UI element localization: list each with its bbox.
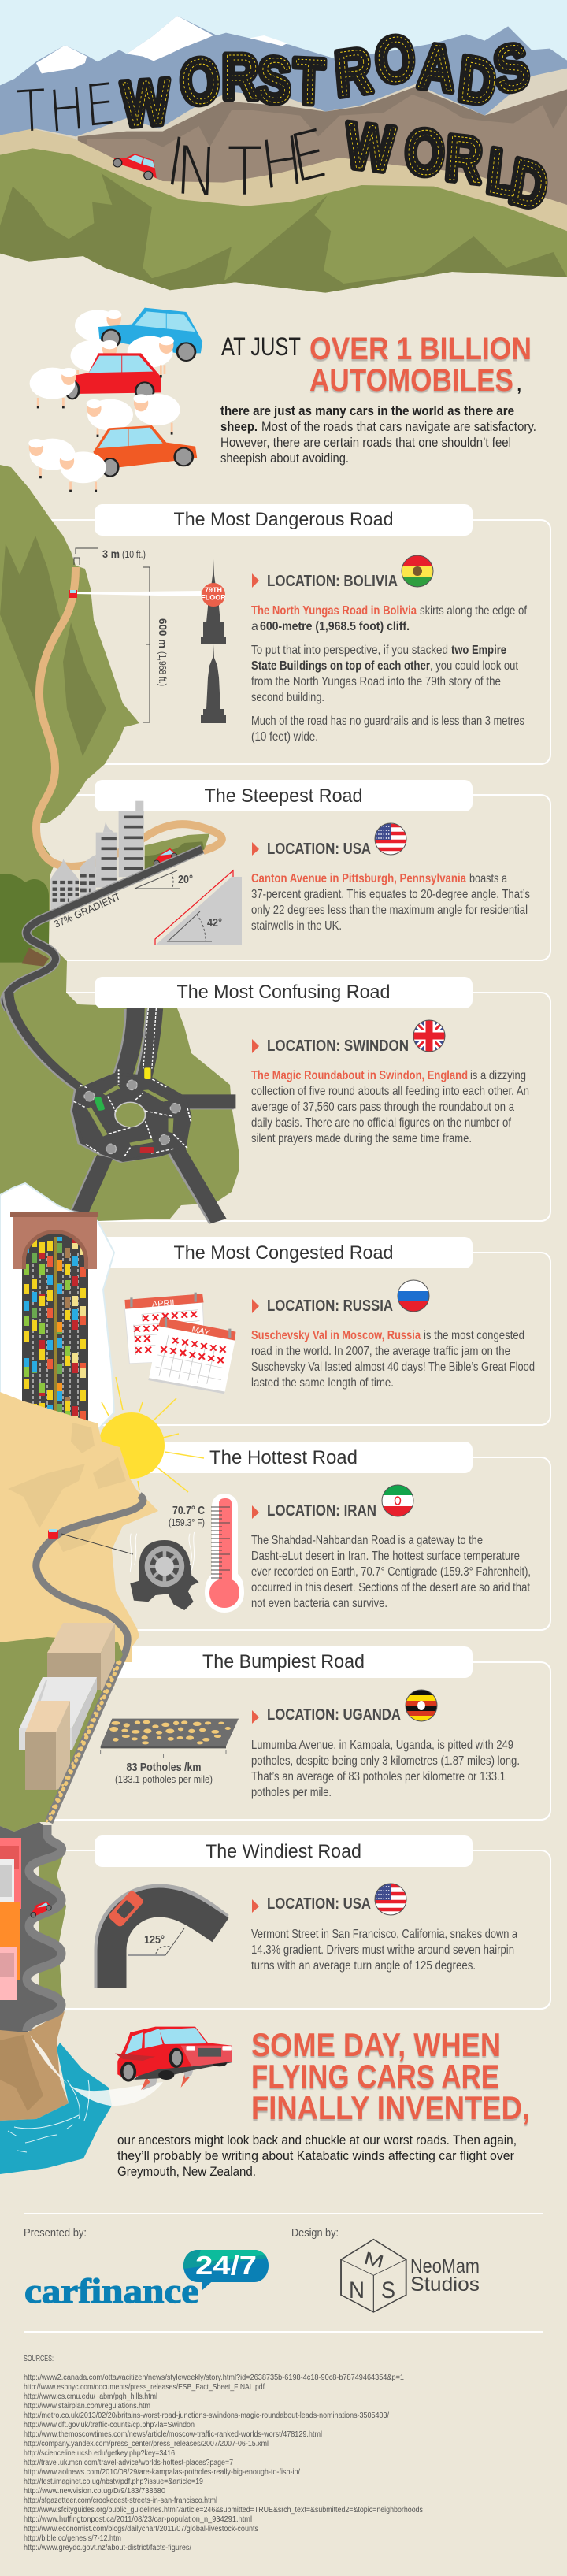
- flag: bolivia: [402, 555, 433, 587]
- icon: tiny red car on desert road: [48, 1529, 58, 1539]
- closing paragraph: our ancestors might look back and chuckle at our worst roads. Then again,: [117, 2132, 517, 2147]
- angle lines: [128, 1928, 184, 1955]
- location: usa (steepest): LOCATION: USA: [267, 841, 371, 858]
- heading: bumpiest: The Bumpiest Road: [202, 1651, 365, 1672]
- lane markings: [74, 1069, 191, 1157]
- location: russia: LOCATION: RUSSIA: [267, 1297, 393, 1315]
- title: road words: WORSTROADS: [122, 21, 534, 140]
- heading: most confusing: The Most Confusing Road: [176, 982, 391, 1003]
- label: design by: Design by:: [291, 2226, 339, 2240]
- diagram: 42 degree stairs: 42°: [207, 916, 222, 930]
- text: steepest road: boasts a: [469, 872, 507, 885]
- sources: http://www.dft.gov.uk/traffic-counts/cp.php?la=Swindon: [24, 2421, 195, 2429]
- sources: http://sfgazetteer.com/crookedest-streets-in-san-francisco.html: [24, 2496, 217, 2505]
- title: road words: WORLD: [345, 109, 554, 224]
- location: swindon: LOCATION: SWINDON: [267, 1037, 409, 1055]
- terrain: cliff: [0, 2011, 69, 2121]
- label: potholes per km: [115, 1761, 213, 1785]
- trees and soil: [0, 874, 49, 967]
- text: confusing road: average of 37,560 cars pass through the roundabout on a: [251, 1101, 514, 1114]
- sources: http://www.newvision.co.ug/D/9/183/738680: [24, 2487, 165, 2496]
- text: dangerous road: , you could look out: [430, 659, 518, 673]
- text: dangerous road: To put that into perspective, if you stacked: [251, 644, 448, 657]
- text: dangerous road: (10 feet) wide.: [251, 730, 318, 744]
- road: pothole road: [46, 1662, 120, 1822]
- flag: iran: [382, 1485, 413, 1516]
- illustration: sheep and cars: [28, 308, 202, 492]
- heading: steepest: [94, 780, 472, 811]
- intro paragraph: sheep.: [220, 419, 258, 434]
- small red car: [153, 848, 177, 866]
- diagram: 20 degree angle: [135, 870, 193, 889]
- wordmark: Studios: [410, 2273, 480, 2296]
- label: 37% gradient: 37% GRADIENT: [52, 890, 122, 930]
- closing paragraph: they’ll probably be writing about Katabatic winds affecting car flight over: [117, 2148, 514, 2163]
- mini roundabouts: [84, 1080, 180, 1154]
- traffic: [27, 1237, 83, 1430]
- illustration: melted tyre: [130, 1532, 199, 1610]
- sources: http://www.sfcityguides.org/public_guidelines.html?article=246&submitted=TRUE&srch_text=&submitted2=&topic=neighborhoods: [24, 2506, 423, 2515]
- divider: [24, 2213, 543, 2214]
- label: temperature: [169, 1504, 205, 1528]
- heading: most congested: The Most Congested Road: [173, 1242, 394, 1264]
- hero landscape: [0, 0, 567, 293]
- heading: windiest: [94, 1835, 472, 1867]
- text: dangerous road: [251, 604, 527, 744]
- location: bolivia: LOCATION: BOLIVIA: [267, 573, 398, 590]
- text: dangerous road: The North Yungas Road in Bolivia: [251, 604, 417, 618]
- illustration: pothole slab: [101, 1719, 239, 1758]
- sources: http://test.imaginet.co.ug/nbstv/pdf.php?issue=&article=19: [24, 2478, 203, 2486]
- sources: http://www.aolnews.com/2010/08/29/are-kampalas-potholes-really-big-enough-to-fish-in/: [24, 2468, 300, 2477]
- sources: http://www.stairplan.com/regulations.htm: [24, 2402, 150, 2411]
- terrain: water: [0, 2043, 112, 2174]
- logo: neomam studios: [341, 2240, 480, 2312]
- logo: carfinance 24/7: 24/7: [195, 2251, 257, 2280]
- heading: hottest: [94, 1442, 472, 1473]
- flag: usa: [375, 823, 406, 855]
- illustration: dangerous road diagram: [69, 547, 226, 723]
- lane lines: [33, 1253, 78, 1430]
- cube letters: N: [349, 2277, 365, 2303]
- text: windiest road: turns with an average turn angle of 125 degrees.: [251, 1959, 476, 1973]
- heading: most congested: [94, 1237, 472, 1268]
- text: hottest road: The Shahdad-Nahbandan Road is a gateway to the: [251, 1534, 483, 1547]
- road: steep asphalt: [5, 849, 202, 1010]
- illustration: buildings: [19, 1623, 115, 1790]
- title: [15, 21, 554, 224]
- label: presented by: Presented by:: [24, 2226, 87, 2240]
- panel frames: [32, 520, 550, 2009]
- logo: carfinance 24/7: [25, 2250, 269, 2303]
- location: usa (windiest): LOCATION: USA: [267, 1895, 371, 1913]
- text: congested road: is the most congested: [424, 1329, 524, 1342]
- sources: http://www.esbnyc.com/documents/press_releases/ESB_Fact_Sheet_FINAL.pdf: [24, 2383, 265, 2392]
- orange car: [107, 1890, 145, 1928]
- label: 3 m: (10 ft.): [122, 548, 146, 560]
- heading: most confusing: [94, 977, 472, 1008]
- hill inside loop: [145, 833, 209, 870]
- flag: uganda: [406, 1690, 437, 1721]
- buildings: [50, 801, 144, 910]
- icon: small red car on hero road: [113, 154, 157, 180]
- title: thin words: [15, 70, 333, 212]
- sources: [24, 2355, 423, 2552]
- central island: [115, 1102, 146, 1127]
- text: bumpiest road: [251, 1739, 520, 1799]
- location: usa (windiest): [252, 1884, 406, 1915]
- flag: uk: [413, 1020, 445, 1052]
- location: swindon: [252, 1020, 445, 1055]
- heading: most dangerous: [94, 504, 472, 536]
- flag: usa: [375, 1884, 406, 1915]
- intro heading: [221, 332, 532, 398]
- label: 3 m: 3 m: [102, 547, 120, 560]
- closing paragraph: Greymouth, New Zealand.: [117, 2164, 256, 2179]
- label: 600 m: [157, 618, 169, 686]
- title: thin words: THE: [15, 70, 117, 145]
- illustration: calendars: [124, 1293, 235, 1394]
- label: april and may: APRIL: [152, 1298, 177, 1309]
- title: road words: [120, 21, 554, 224]
- text: confusing road: daily basis. There are no official figures on the number of: [251, 1116, 511, 1130]
- sources: http://scienceline.ucsb.edu/getkey.php?key=3416: [24, 2449, 175, 2458]
- marker: 79th floor: 79TH: [205, 586, 222, 594]
- icon: tiny car: [69, 590, 77, 598]
- text: dangerous road: 600-metre (1,968.5 foot) cliff.: [260, 620, 410, 633]
- illustration: vermont street hairpin: [107, 1890, 220, 1988]
- closing headline: [251, 2026, 530, 2126]
- location: uganda: [252, 1690, 437, 1724]
- sources: http://metro.co.uk/2013/02/20/britains-worst-road-junctions-swindons-magic-roundabout-leads-nominations-3505403/: [24, 2411, 389, 2420]
- pointer line to tyre: [61, 1534, 133, 1554]
- sources: http://travel.uk.msn.com/travel-advice/worlds-hottest-places?page=7: [24, 2459, 233, 2467]
- text: steepest road: stairwells in the UK.: [251, 919, 342, 933]
- intro heading: AUTOMOBILES: [309, 363, 513, 398]
- terrain: green hillside: [0, 465, 239, 1221]
- location: russia: [252, 1280, 429, 1315]
- wordmark: NeoMam: [410, 2255, 480, 2277]
- intro paragraph: [220, 403, 536, 466]
- sources: http://www2.canada.com/ottawacitizen/news/styleweekly/story.html?id=2638735b-6198-4c18-90c8-b78749464354&p=1: [24, 2374, 404, 2382]
- text: confusing road: [251, 1069, 529, 1145]
- location: usa (steepest): [252, 823, 406, 858]
- marker: 79th floor: [201, 583, 226, 607]
- bracket: cliff height: [143, 567, 150, 722]
- text: congested road: Suschevsky Val in Moscow, Russia: [251, 1329, 421, 1342]
- sources: http://www.themoscowtimes.com/news/article/moscow-traffic-ranked-worlds-worst/478129.html: [24, 2430, 322, 2439]
- text: dangerous road: second building.: [251, 691, 324, 704]
- sources: http://www.huffingtonpost.ca/2011/08/23/car-population_n_934291.html: [24, 2515, 252, 2524]
- illustration: magic roundabout: [7, 993, 235, 1222]
- sources: http://www.greydc.govt.nz/about-district/facts-figures/: [24, 2544, 191, 2552]
- sources: SOURCES:: [24, 2355, 54, 2363]
- label: 600 m: (1,968 ft.): [157, 651, 169, 686]
- text: hottest road: [251, 1534, 531, 1610]
- location: uganda: LOCATION: UGANDA: [267, 1706, 401, 1724]
- icon: sun rays: [102, 1377, 204, 1492]
- title: thin words: IN: [161, 124, 220, 212]
- sources: http://www.economist.com/blogs/dailychart/2011/07/global-livestock-counts: [24, 2525, 258, 2533]
- label: 3 m: [102, 547, 146, 560]
- text: confusing road: silent prayers made during the same time frame.: [251, 1132, 472, 1145]
- label: april and may: MAY: [191, 1324, 211, 1338]
- flag: russia: [398, 1280, 429, 1312]
- text: congested road: [251, 1329, 535, 1390]
- text: confusing road: is a dizzying: [470, 1069, 526, 1082]
- wordmark: [410, 2255, 480, 2296]
- location: iran: [252, 1485, 413, 1520]
- icon: small red car on windy road: [31, 1901, 51, 1917]
- label: potholes per km: 83 Potholes /km: [126, 1761, 202, 1774]
- logo cube: [341, 2240, 406, 2312]
- sources: http://bible.cc/genesis/7-12.htm: [24, 2534, 121, 2543]
- traffic islands: [87, 1085, 173, 1146]
- label: 600 m: 600 m: [157, 618, 169, 648]
- illustration: congested tunnel road: [10, 1212, 98, 1430]
- intro paragraph: there are just as many cars in the world as there are: [220, 403, 514, 418]
- intro paragraph: However, there are certain roads that one shouldn’t feel: [220, 435, 511, 450]
- title: road words: WORLD: [343, 109, 552, 224]
- road: sand mountain road: [36, 567, 222, 867]
- heading: windiest: The Windiest Road: [206, 1841, 361, 1862]
- illustration: steepest road city: [0, 801, 209, 967]
- intro heading: OVER 1 BILLION: [309, 332, 532, 366]
- text: congested road: lasted the same length of time.: [251, 1376, 394, 1390]
- logo: carfinance 24/7: carfinance: [24, 2272, 198, 2311]
- closing headline: FLYING CARS ARE: [251, 2058, 499, 2095]
- text: dangerous road: from the North Yungas Road into the 79th story of the: [251, 675, 501, 689]
- terrain: desert: [0, 1392, 158, 1662]
- smoke trail: [30, 2035, 163, 2106]
- text: bumpiest road: Lumumba Avenue, in Kampala, Uganda, is pitted with 249: [251, 1739, 513, 1752]
- cube letters: S: [381, 2277, 395, 2303]
- diagram: 42 degree stairs: [155, 870, 242, 945]
- cube letters: [349, 2248, 395, 2303]
- label: april and may: [152, 1298, 211, 1338]
- title: thin words: THE: [228, 115, 333, 210]
- text: windiest road: 14.3% gradient. Drivers must writhe around seven hairpin: [251, 1943, 514, 1957]
- icon: empire state buildings: [201, 559, 226, 723]
- text: dangerous road: skirts along the edge of: [420, 604, 527, 618]
- illustration: city blocks: [0, 1838, 21, 2000]
- cube letters: M: [362, 2248, 386, 2272]
- heading: hottest: The Hottest Road: [209, 1447, 358, 1468]
- sources: http://company.yandex.com/press_center/press_releases/2007/2007-06-15.xml: [24, 2440, 269, 2448]
- text: congested road: road in the world. In 2007, the average traffic jam on the: [251, 1345, 510, 1358]
- intro paragraph: sheepish about avoiding.: [220, 451, 349, 466]
- illustration: flying car: [115, 2027, 232, 2090]
- text: dangerous road: State Buildings on top of each other: [251, 659, 430, 673]
- terrain: lower green and city ground: [0, 1637, 123, 2032]
- closing headline: FINALLY INVENTED,: [251, 2089, 530, 2126]
- icon: sun: [98, 1412, 165, 1479]
- location: iran: LOCATION: IRAN: [267, 1502, 376, 1520]
- text: steepest road: Canton Avenue in Pittsburgh, Pennsylvania: [251, 872, 466, 885]
- sources: http://www.cs.cmu.edu/~abm/pgh_hills.html: [24, 2392, 158, 2401]
- diagram: 20 degree angle: 20°: [178, 873, 193, 886]
- icon: road width gate: [74, 548, 98, 565]
- label: temperature: 70.7° C: [172, 1504, 205, 1517]
- text: steepest road: [251, 872, 530, 933]
- marker: 79th floor: FLOOR: [201, 594, 226, 602]
- intro heading: ,: [516, 370, 522, 396]
- location: bolivia: [252, 555, 433, 590]
- heading: most dangerous: The Most Dangerous Road: [173, 509, 394, 530]
- label: potholes per km: (133.1 potholes per mile): [115, 1773, 213, 1785]
- tunnel portal: [13, 1217, 97, 1269]
- terrain: snow: [0, 1183, 114, 1430]
- road: windy road: [27, 1825, 62, 2031]
- text: windiest road: [251, 1928, 517, 1973]
- title: road words: WORSTROADS: [120, 21, 533, 140]
- text: bumpiest road: potholes per mile.: [251, 1786, 332, 1799]
- text: dangerous road: a: [251, 620, 258, 633]
- road: desert road: [36, 1495, 143, 1670]
- heading: bumpiest: [94, 1646, 472, 1678]
- road: [22, 1233, 88, 1430]
- label: 125 degrees: 125°: [144, 1933, 165, 1947]
- icon: thermometer: [205, 1494, 244, 1613]
- text: bumpiest road: That’s an average of 83 potholes per kilometre or 133.1: [251, 1770, 506, 1784]
- divider: [24, 2331, 543, 2333]
- heading: steepest: The Steepest Road: [205, 785, 362, 807]
- intro paragraph: Most of the roads that cars navigate are satisfactory.: [261, 419, 536, 434]
- text: confusing road: The Magic Roundabout in Swindon, England: [251, 1069, 468, 1082]
- label: temperature: (159.3° F): [169, 1516, 205, 1528]
- cars: [94, 1067, 154, 1153]
- closing headline: SOME DAY, WHEN: [251, 2026, 501, 2063]
- intro heading: AT JUST: [221, 332, 301, 361]
- beam to 79th floor: [76, 591, 201, 596]
- text: hottest road: Dasht-eLut desert in Iran. The hottest surface temperature: [251, 1550, 520, 1563]
- text: hottest road: not even bacteria can survive.: [251, 1597, 387, 1610]
- text: dangerous road: two Empire: [451, 644, 506, 657]
- closing paragraph: [117, 2132, 517, 2179]
